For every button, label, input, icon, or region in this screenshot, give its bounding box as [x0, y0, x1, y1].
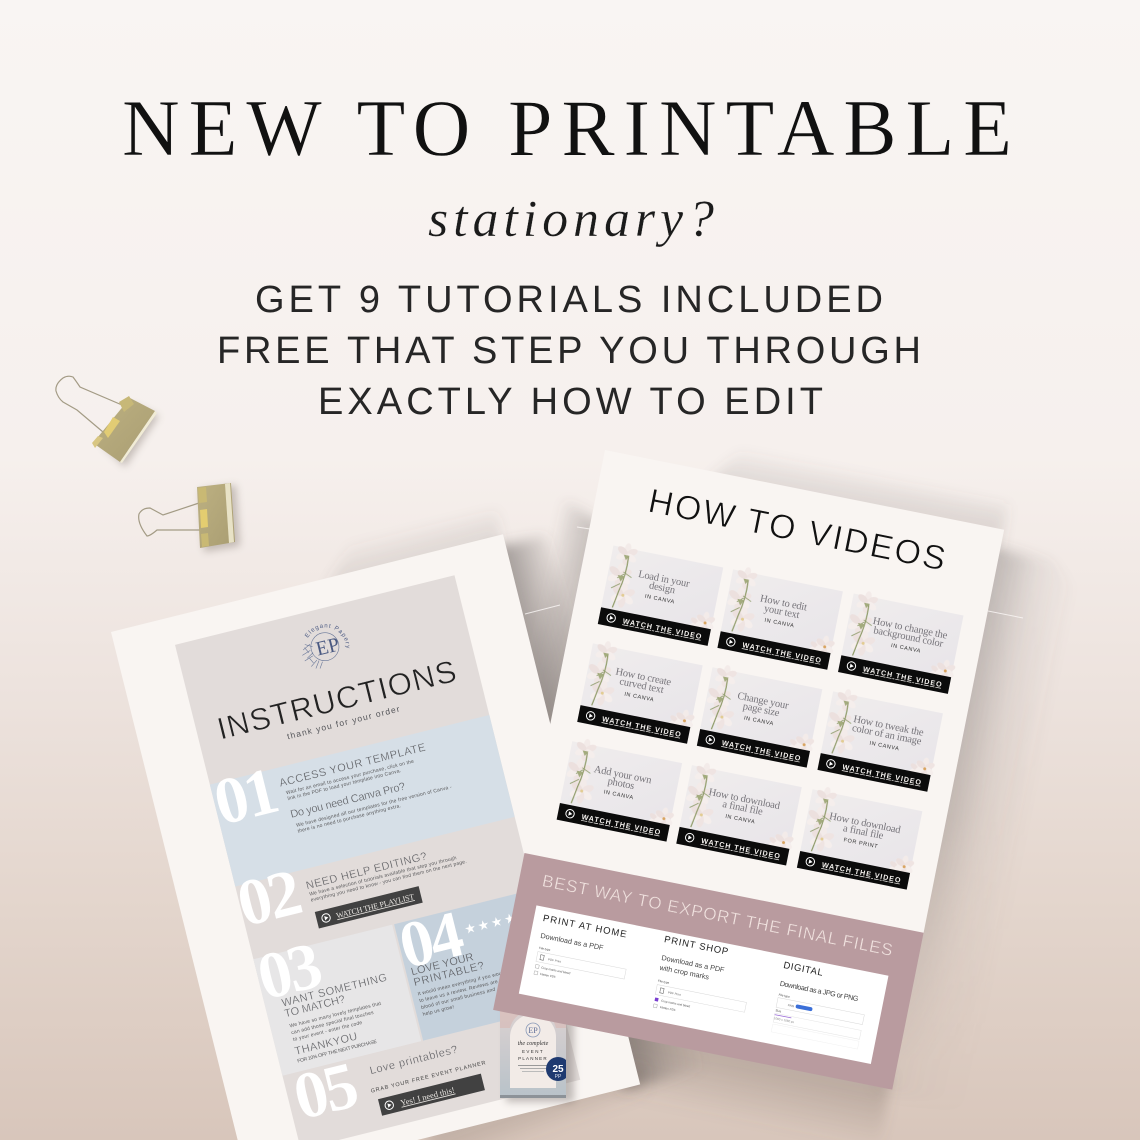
card 7 [556, 736, 687, 842]
section 01: Wait for an email to access your purchase, click on the [286, 759, 415, 796]
section 01: link in the PDF to load your template into Canva. [287, 768, 402, 802]
section 03: to your event - enter the code [292, 1020, 363, 1043]
card 8: How to download [708, 787, 782, 812]
section 03: 03 [251, 929, 327, 1014]
booklet: event planner: PLANNER [518, 1056, 548, 1061]
card 9: WATCH THE VIDEO [821, 860, 902, 885]
card 7: photos [607, 776, 635, 792]
shadow: instructions sheet [320, 510, 706, 1140]
card 5 [696, 662, 827, 768]
section 05: GRAB YOUR FREE EVENT PLANNER [370, 1060, 486, 1095]
column: digital: File type [778, 993, 790, 999]
booklet: event planner: EVENT [522, 1049, 544, 1054]
card 1 [597, 540, 728, 647]
card 8 [676, 760, 806, 866]
column: digital: DIGITAL [782, 960, 824, 979]
column: print shop: Flatten PDF [660, 1005, 676, 1012]
panel: export section [493, 853, 924, 1090]
section 03: FOR 10% OFF THE NEXT PURCHASE [297, 1039, 378, 1065]
heading: export: BEST WAY TO EXPORT THE FINAL FILES [541, 871, 894, 960]
panel: section 03 [253, 925, 421, 1076]
card 4: How to create [615, 666, 672, 688]
section 04: PRINTABLE? [412, 960, 485, 989]
subtitle: stationary? [428, 191, 714, 248]
section 04: blood of our small business and [420, 987, 496, 1011]
shadow: how to videos sheet [537, 458, 1053, 1132]
button: watch the playlist [315, 886, 423, 929]
column: digital [770, 960, 872, 1049]
card 2: IN CANVA [764, 618, 795, 629]
booklet: event planner [500, 1011, 578, 1106]
section 02: everything you need to know - you can find them on the next page. [310, 859, 467, 904]
section 04: to leave us a review. Reviews are the [419, 977, 508, 1004]
section 02: 02 [230, 855, 307, 941]
section 04: 04 [392, 897, 470, 983]
card 5: page size [742, 701, 781, 719]
card 9: a final file [842, 823, 885, 842]
card 8: IN CANVA [725, 814, 756, 826]
column: print shop: Crop marks and bleed [661, 999, 691, 1008]
column: print at home: Flatten PDF [540, 972, 556, 979]
grey inner page [175, 575, 580, 1140]
icon: binder clip bottom [139, 483, 240, 552]
section 03: WANT SOMETHING [281, 972, 388, 1009]
section 03 [251, 914, 402, 1069]
card 6: IN CANVA [869, 741, 900, 752]
heading: instructions: INSTRUCTIONS [214, 653, 460, 747]
card 1: WATCH THE VIDEO [622, 616, 703, 641]
subheading: thank you: thank you for your order [286, 703, 402, 741]
section 01: We have designed all our templates for the free version of Canva - [296, 784, 453, 829]
card 9: FOR PRINT [843, 837, 879, 850]
booklet: event planner: PP [555, 1074, 562, 1080]
logo [302, 624, 350, 669]
icon: binder clip top [56, 376, 159, 467]
card 2: WATCH THE VIDEO [742, 640, 822, 665]
column: print shop: PRINT SHOP [663, 934, 729, 958]
section 03: THANKYOU [294, 1031, 359, 1058]
column: digital: 1080 x 1080 px [774, 1016, 795, 1024]
card 5: Change your [736, 691, 790, 712]
column: print shop: Download as a PDF [661, 953, 726, 974]
card 8: a final file [721, 799, 764, 818]
column: digital: Size [775, 1008, 782, 1013]
card 6: How to tweak the [852, 714, 925, 739]
card 2: How to edit [759, 593, 808, 614]
card 3: How to change the [872, 616, 949, 642]
card 6 [817, 686, 947, 792]
column: digital: Download as a JPG or PNG [779, 979, 860, 1003]
panel: instructions sheet [111, 534, 640, 1140]
column: print at home: PRINT AT HOME [542, 913, 627, 940]
card 1: design [648, 580, 677, 596]
booklet: event planner: EP [528, 1026, 538, 1035]
band: blue section 01 [210, 715, 515, 886]
card 1: Load in your [637, 569, 691, 590]
column: digital: PNG [787, 1003, 795, 1008]
section 04: It would mean everything if you would [417, 970, 507, 997]
card 7: IN CANVA [603, 789, 634, 801]
icon: stars: ★★★★★ [463, 907, 533, 938]
card 3 [837, 588, 968, 695]
title: NEW TO PRINTABLE [122, 85, 1012, 173]
card 4: curved text [618, 676, 665, 696]
intro text: FREE THAT STEP YOU THROUGH [217, 330, 921, 372]
card 5: IN CANVA [743, 715, 774, 727]
section 01 [207, 712, 454, 852]
card 3: background color [872, 625, 944, 650]
booklet: event planner: the complete [518, 1041, 549, 1047]
section 02 [230, 814, 474, 946]
card 4: IN CANVA [624, 692, 655, 703]
section 05: Love printables? [369, 1044, 459, 1077]
card 5: WATCH THE VIDEO [721, 738, 802, 763]
card 9: How to download [828, 811, 902, 836]
section 05 [287, 1017, 492, 1135]
card 4 [576, 638, 707, 744]
section 05: 05 [287, 1049, 363, 1134]
card 7: WATCH THE VIDEO [581, 812, 661, 837]
button: watch the playlist: WATCH THE PLAYLIST [335, 892, 415, 920]
card 2 [717, 564, 847, 670]
intro text: GET 9 TUTORIALS INCLUDED [255, 279, 883, 321]
section 04: LOVE YOUR [410, 951, 475, 978]
section 03: We have so many lovely templates that [289, 1001, 382, 1029]
section 01: there is no need to purchase anything extra. [297, 803, 402, 835]
column: print at home: File type [539, 946, 551, 952]
card 1: IN CANVA [644, 594, 675, 606]
section 04 [392, 880, 549, 1019]
card 8: WATCH THE VIDEO [700, 836, 781, 861]
card 6: color of an image [851, 723, 923, 748]
column: print shop: PDF Print [668, 990, 681, 997]
intro text: EXACTLY HOW TO EDIT [318, 381, 823, 423]
section 02: We have a selection of tutorials available that step you through [309, 855, 457, 898]
white export box [519, 905, 888, 1064]
column: print shop: with crop marks [658, 963, 710, 982]
button: yes I need this: Yes! I need this! [399, 1085, 456, 1108]
heading: how to videos: HOW TO VIDEOS [645, 482, 949, 578]
button: yes I need this [378, 1074, 485, 1116]
section 01: Do you need Canva Pro? [289, 781, 407, 821]
section 01: ACCESS YOUR TEMPLATE [278, 742, 427, 790]
intro text [217, 279, 921, 423]
section 03: can add those special final touches [291, 1010, 375, 1036]
card 9 [796, 784, 927, 890]
section 03: TO MATCH? [283, 994, 346, 1020]
logo: EP [314, 634, 342, 661]
column: print at home: PDF Print [548, 957, 561, 964]
card 2: your text [763, 603, 801, 621]
card 7: Add your own [593, 764, 653, 787]
section 01: 01 [207, 754, 283, 840]
column: print shop [651, 934, 756, 1025]
logo: Elegant Papery [304, 624, 350, 648]
column: print shop: File type [658, 979, 670, 985]
card 4: WATCH THE VIDEO [601, 714, 682, 739]
column: print at home: Download as a PDF [540, 931, 605, 952]
panel: how to videos sheet [493, 450, 1004, 1090]
panel: section 04 [394, 890, 562, 1041]
column: print at home [532, 913, 634, 992]
section 04: help us grow! [422, 1004, 455, 1018]
card 3: WATCH THE VIDEO [862, 664, 943, 689]
section 02: NEED HELP EDITING? [305, 850, 428, 892]
booklet: event planner: 25 [552, 1064, 564, 1075]
card 3: IN CANVA [890, 643, 921, 655]
column: print at home: Crop marks and bleed [541, 966, 571, 975]
card 6: WATCH THE VIDEO [842, 762, 922, 787]
